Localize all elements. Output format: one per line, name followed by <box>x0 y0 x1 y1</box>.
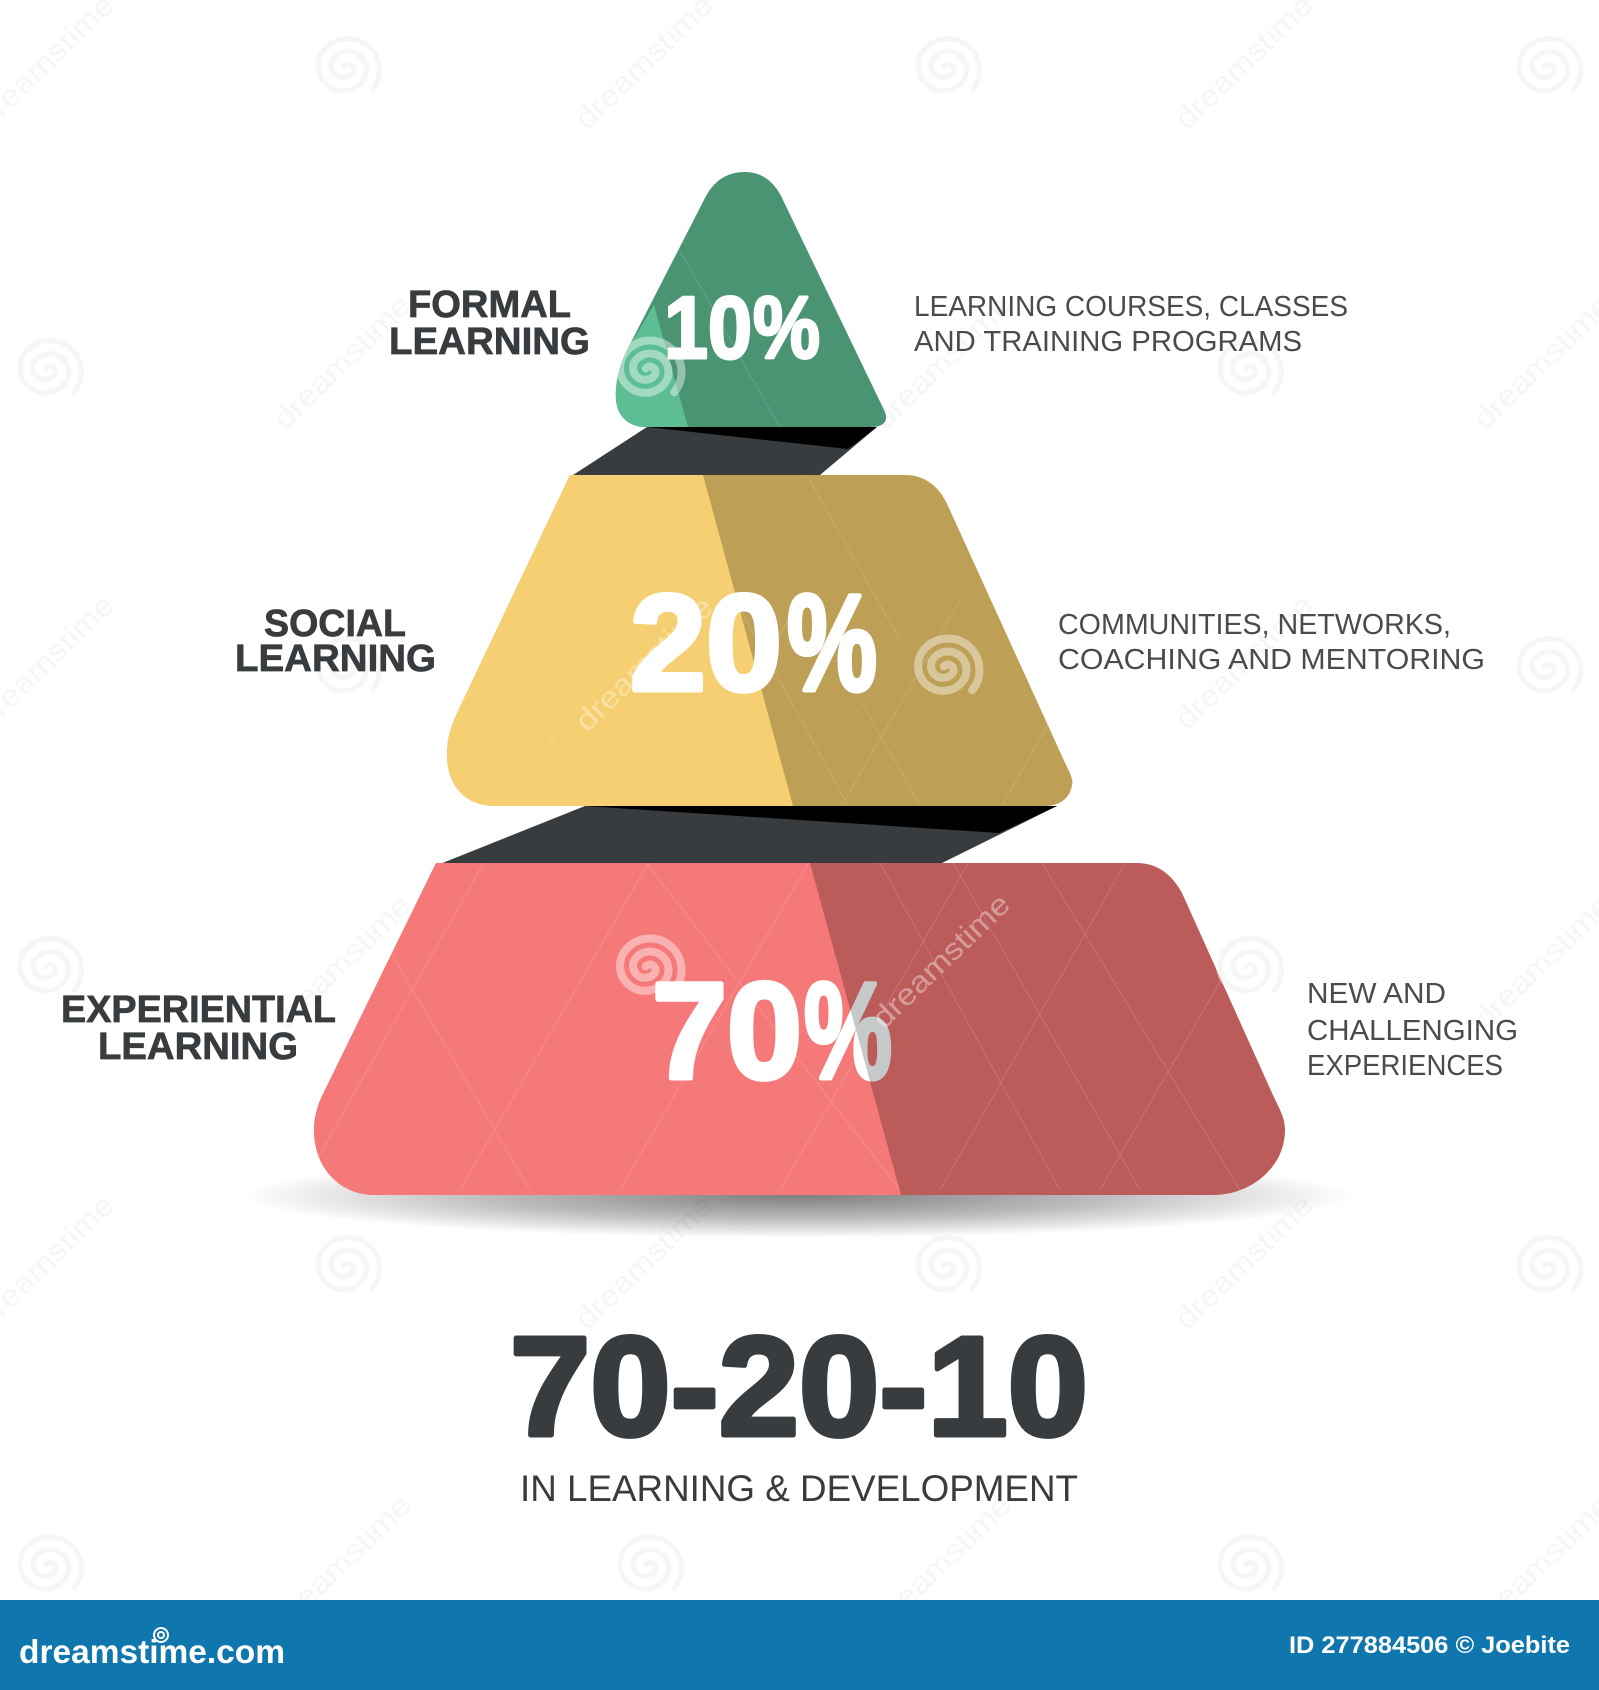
watermark: spirals and wordmarks: dreamstime <box>1467 289 1599 436</box>
label: experiential learning: LEARNING <box>98 1026 298 1068</box>
pyramid tier: red 70% <box>314 863 1285 1195</box>
description: experiential learning: NEW AND <box>1307 978 1446 1010</box>
pyramid tier: yellow 20% <box>447 475 1072 806</box>
percentage: 10% <box>664 278 820 377</box>
watermark: lines over pyramid <box>318 248 1240 1190</box>
watermark: spirals on tiers <box>610 328 1294 1009</box>
label: formal learning: FORMAL <box>408 284 571 326</box>
percentage: 70%: % <box>804 955 892 1108</box>
description: experiential learning: EXPERIENCES <box>1307 1050 1503 1082</box>
watermark: spirals and wordmarks: dreamstime <box>1169 0 1320 136</box>
watermark: spirals and wordmarks: dreamstime <box>867 289 1018 436</box>
label: social learning <box>235 603 436 680</box>
subtitle: IN LEARNING & DEVELOPMENT <box>520 1468 1078 1509</box>
watermark: spirals and wordmarks: dreamstime <box>267 1489 418 1636</box>
footer: image credit: ID 277884506 © Joebite <box>1289 1632 1570 1659</box>
percentage: 20%: 20 <box>630 567 782 720</box>
percentage: 70%: 70 <box>652 955 802 1108</box>
title: 70-20-10 <box>510 1307 1088 1465</box>
watermark: wordmark on red tier: dreamstime <box>866 888 1017 1035</box>
percentage: 70% <box>652 955 892 1108</box>
description: formal learning <box>914 291 1348 358</box>
percentage: 20%: % <box>787 567 877 720</box>
percentage: 20% <box>630 567 877 720</box>
connector: between yellow and red tiers <box>440 806 1057 864</box>
watermark: spirals and wordmarks: dreamstime <box>569 0 720 136</box>
description: social learning <box>1058 609 1485 676</box>
connector: between green and yellow tiers <box>573 427 877 475</box>
label: social learning: LEARNING <box>235 638 436 680</box>
percentage: 10%: 10 <box>664 278 752 377</box>
label: social learning: SOCIAL <box>264 603 406 645</box>
watermark: wordmark on yellow tier: dreamstime <box>569 591 720 738</box>
description: social learning: COMMUNITIES, NETWORKS, <box>1058 609 1451 641</box>
description: formal learning: AND TRAINING PROGRAMS <box>914 326 1302 358</box>
watermark: spirals and wordmarks: dreamstime <box>1467 1489 1599 1636</box>
pyramid base shadow <box>241 1154 1353 1238</box>
description: experiential learning <box>1307 978 1518 1082</box>
percentage: 10%: % <box>753 278 820 377</box>
label: experiential learning <box>61 989 336 1068</box>
label: experiential learning: EXPERIENTIAL <box>61 989 336 1031</box>
description: experiential learning: CHALLENGING <box>1307 1015 1518 1047</box>
watermark: spirals and wordmarks: dreamstime <box>1467 889 1599 1036</box>
label: formal learning <box>389 284 590 363</box>
icon: brand spiral <box>154 1628 168 1642</box>
description: social learning: COACHING AND MENTORING <box>1058 644 1485 676</box>
footer: brand wordmark: dreamstime.com <box>19 1633 285 1670</box>
pyramid tier: green 10% <box>616 172 886 427</box>
footer bar <box>0 1600 1599 1690</box>
watermark: spirals and wordmarks: dreamstime <box>1169 1189 1320 1336</box>
watermark: spirals and wordmarks: dreamstime <box>267 889 418 1036</box>
watermark: spirals and wordmarks: dreamstime <box>569 1189 720 1336</box>
description: formal learning: LEARNING COURSES, CLASSES <box>914 291 1348 323</box>
watermark: spirals and wordmarks: dreamstime <box>867 1489 1018 1636</box>
watermark: spirals and wordmarks: dreamstime <box>1169 589 1320 736</box>
label: formal learning: LEARNING <box>389 321 590 363</box>
watermark: spirals and wordmarks: dreamstime <box>267 289 418 436</box>
